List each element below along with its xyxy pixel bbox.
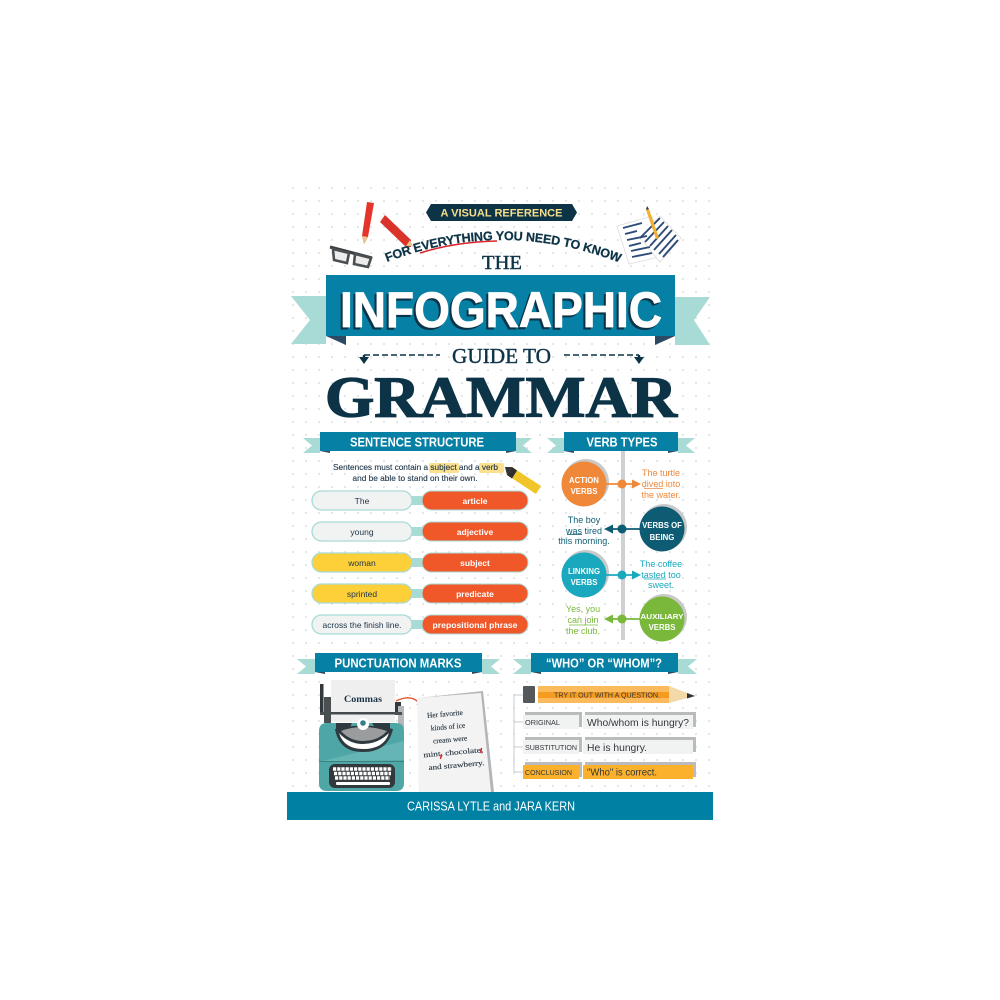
linking verbs: VERBS bbox=[571, 578, 597, 587]
verbs of being: VERBS OF bbox=[642, 521, 682, 530]
row 2: young / adjective: young bbox=[350, 527, 374, 537]
row: original bbox=[523, 712, 696, 729]
row 5: across the finish line / prepositional phrase bbox=[312, 615, 528, 634]
row 3: woman / subject bbox=[312, 553, 528, 572]
subtitle pill: A VISUAL REFERENCE bbox=[440, 208, 562, 220]
typewriter paper: Commas bbox=[344, 695, 382, 705]
dashed arrow right bbox=[564, 355, 644, 364]
linking verbs: The coffee bbox=[640, 559, 682, 569]
heading: who or whom bbox=[513, 653, 697, 674]
intro text: Sentences must contain a subject and a verb bbox=[333, 463, 498, 472]
heading: punctuation marks bbox=[297, 653, 500, 674]
note paper: Her favorite bbox=[427, 708, 464, 720]
action verbs bbox=[562, 459, 681, 506]
heading: sentence structure: SENTENCE STRUCTURE bbox=[350, 434, 484, 450]
verbs of being: this morning. bbox=[558, 536, 610, 546]
panel: verb types bbox=[547, 432, 695, 642]
typewriter keys bbox=[329, 764, 395, 788]
note paper bbox=[417, 691, 494, 792]
row 4: sprinted / predicate: sprinted bbox=[347, 589, 377, 599]
icon: pencil bbox=[523, 686, 695, 703]
type basket bbox=[335, 718, 393, 752]
row 4: sprinted / predicate: predicate bbox=[456, 589, 494, 599]
heading: punctuation marks: PUNCTUATION MARKS bbox=[334, 656, 462, 670]
row: original: ORIGINAL bbox=[525, 718, 560, 727]
row: original: Who/whom is hungry? bbox=[587, 718, 689, 729]
connector lines bbox=[514, 695, 523, 772]
icon: typewriter bbox=[319, 680, 404, 791]
footer bar bbox=[287, 792, 713, 820]
title: INFOGRAPHIC: INFOGRAPHIC bbox=[338, 284, 660, 340]
auxiliary verbs: Yes, you bbox=[566, 604, 600, 614]
row 1: The / article: The bbox=[355, 496, 370, 506]
icon: papers and yellow pencil bbox=[617, 206, 681, 264]
auxiliary verbs: VERBS bbox=[649, 623, 675, 632]
title: GRAMMAR: GRAMMAR bbox=[325, 364, 678, 430]
auxiliary verbs: the club. bbox=[566, 626, 600, 636]
panel: who or whom bbox=[513, 653, 697, 779]
linking verbs bbox=[562, 550, 682, 598]
action verbs: VERBS bbox=[571, 487, 597, 496]
row 5: across the finish line / prepositional phrase: prepositional phrase bbox=[432, 620, 518, 630]
note paper: cream were bbox=[433, 733, 468, 745]
row: substitution: He is hungry. bbox=[587, 743, 647, 754]
note paper: mint, chocolate, bbox=[423, 745, 484, 759]
title: THE: THE bbox=[482, 252, 522, 274]
row 1: The / article: article bbox=[462, 496, 488, 506]
subtitle pill bbox=[426, 204, 577, 221]
intro text bbox=[333, 463, 498, 483]
title: INFOGRAPHIC: INFOGRAPHIC bbox=[340, 282, 662, 338]
action verbs: dived into bbox=[642, 479, 680, 489]
verbs of being: The boy bbox=[568, 515, 601, 525]
icon: red pencil one bbox=[362, 202, 374, 244]
verbs of being: BEING bbox=[650, 533, 674, 542]
row: conclusion bbox=[523, 762, 696, 779]
action verbs: ACTION bbox=[569, 476, 599, 485]
linking verbs: sweet. bbox=[648, 580, 674, 590]
panel: sentence structure bbox=[303, 432, 541, 634]
note paper: and strawberry. bbox=[428, 758, 485, 772]
verbs of being: was tired bbox=[565, 526, 602, 536]
intro text: and be able to stand on their own. bbox=[352, 474, 478, 483]
footer bar: CARISSA LYTLE and JARA KERN bbox=[407, 798, 575, 814]
highlights bbox=[429, 463, 504, 473]
row: substitution: SUBSTITUTION bbox=[525, 743, 577, 752]
row 3: woman / subject: woman bbox=[347, 558, 376, 568]
curved red arrow bbox=[396, 698, 423, 708]
row 1: The / article bbox=[312, 491, 528, 510]
panel: punctuation marks bbox=[297, 653, 500, 792]
row 5: across the finish line / prepositional phrase: across the finish line. bbox=[322, 620, 402, 630]
auxiliary verbs bbox=[566, 594, 687, 642]
verbs of being bbox=[558, 504, 687, 552]
action verbs: the water. bbox=[641, 490, 681, 500]
icon: highlighter bbox=[505, 467, 541, 494]
row: substitution bbox=[523, 737, 696, 754]
curved subtitle: FOR EVERYTHING YOU NEED TO KNOW bbox=[384, 231, 622, 262]
red underline bbox=[420, 241, 497, 253]
cover background bbox=[287, 183, 713, 792]
note paper: kinds of ice bbox=[430, 721, 466, 733]
row: conclusion: "Who" is correct. bbox=[587, 768, 657, 778]
row 2: young / adjective: adjective bbox=[457, 527, 493, 537]
dashed arrow left bbox=[359, 355, 440, 364]
linking verbs: LINKING bbox=[568, 567, 600, 576]
row 4: sprinted / predicate bbox=[312, 584, 528, 603]
heading: verb types: VERB TYPES bbox=[586, 434, 658, 450]
icon: glasses bbox=[330, 247, 372, 267]
row 2: young / adjective bbox=[312, 522, 528, 541]
icon: red pencil two bbox=[380, 215, 413, 247]
main ribbon bbox=[291, 275, 710, 345]
title: GUIDE TO: GUIDE TO bbox=[452, 344, 551, 368]
heading: sentence structure bbox=[303, 432, 532, 453]
heading: who or whom: “WHO” OR “WHOM”? bbox=[546, 656, 662, 670]
action verbs: The turtle bbox=[642, 468, 680, 478]
auxiliary verbs: AUXILIARY bbox=[640, 612, 684, 621]
linking verbs: tasted too bbox=[641, 570, 681, 580]
row 3: woman / subject: subject bbox=[460, 558, 490, 568]
timeline axis bbox=[621, 451, 625, 640]
row: conclusion: CONCLUSION bbox=[525, 768, 572, 777]
icon: pencil: TRY IT OUT WITH A QUESTION. bbox=[554, 690, 660, 700]
heading: verb types bbox=[547, 432, 695, 453]
auxiliary verbs: can join bbox=[567, 615, 599, 625]
